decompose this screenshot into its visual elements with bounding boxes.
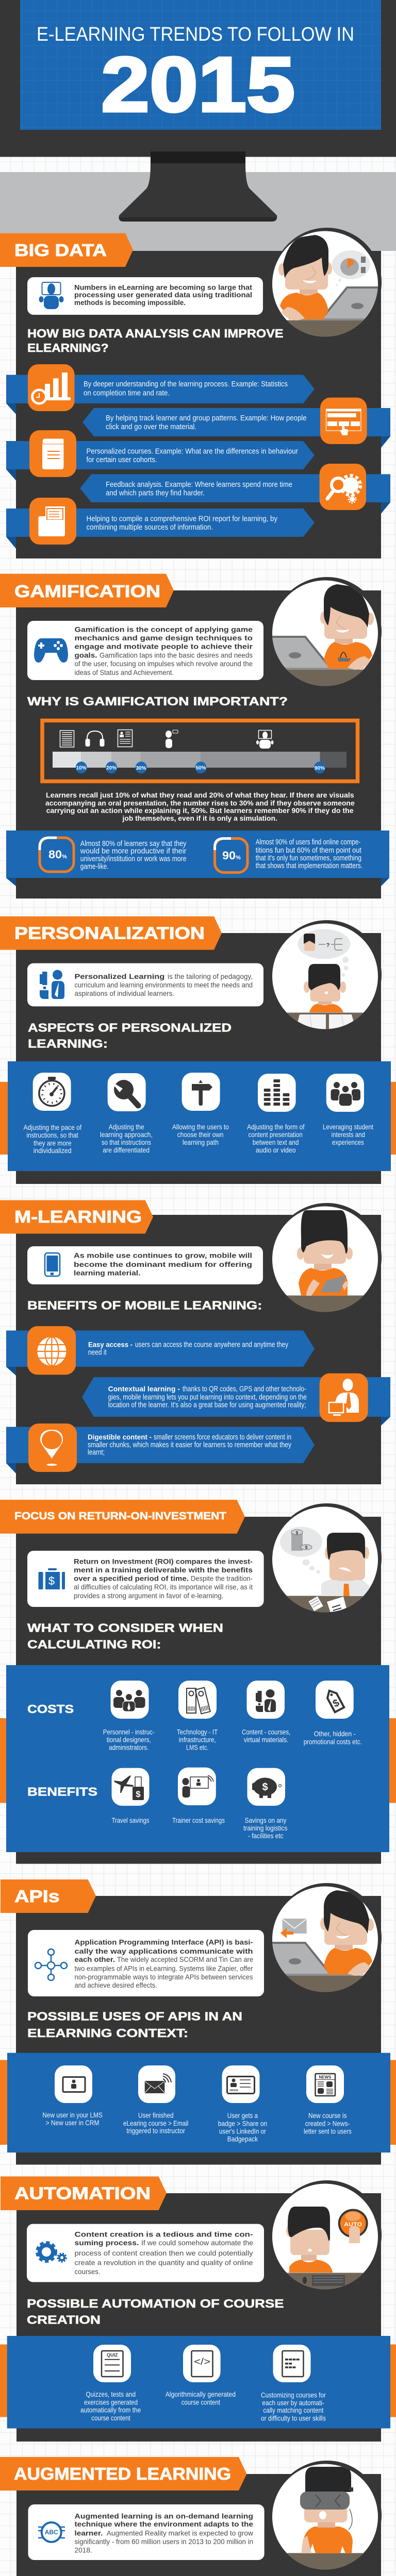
ribbon 5: [6, 498, 315, 549]
use: customizing courses: [261, 2345, 326, 2422]
icon: person and partial figure: [40, 970, 64, 999]
icon: user on screen: [63, 2077, 85, 2092]
icon: folder with document: [38, 506, 65, 536]
aspect 5: interests: Leveraging student: [323, 1123, 373, 1131]
intro card: and achieve desired effects.: [74, 1981, 157, 1989]
icon: quiz sheet: [102, 2351, 123, 2377]
icon: wrench: [110, 1080, 138, 1106]
thought bubble: coins: $: [296, 1531, 299, 1535]
ribbon: digestible content: smaller chunks, which makes it easier for learners to remember what they: [88, 1441, 292, 1449]
icon: stopwatch: [39, 1077, 64, 1106]
intro card: provides a strong argument in favor of e-learning.: [74, 1591, 224, 1600]
intro card: processing user generated data using traditional: [74, 291, 252, 299]
panel: m-learning: [0, 1200, 390, 1484]
aspect 2: approach: Adjusting the: [109, 1123, 144, 1131]
aspect 4: form: Adjusting the form of: [247, 1123, 305, 1131]
title: E-LEARNING TRENDS TO FOLLOW IN: [37, 24, 354, 45]
intro card: [28, 1930, 264, 1996]
subheading: [27, 2010, 242, 2040]
use: quizzes: exercises generated: [84, 2398, 138, 2406]
panel: personalization: [0, 917, 396, 1184]
icon: quiz sheet: QUIZ: [107, 2352, 118, 2358]
icon: block columns: [264, 1079, 289, 1106]
intro card: suming process.: [74, 2239, 139, 2247]
icon: ABC target: [38, 2522, 65, 2542]
illustration: learner with game controller: [270, 577, 384, 690]
icon: signpost: [192, 1080, 212, 1106]
icon: price tag: $: [331, 1697, 341, 1710]
cost: personnel: tional designers,: [107, 1736, 151, 1744]
stat: 80%: would be more productive if their: [80, 847, 187, 855]
illustration: learner with laptop and pie chart thought: [270, 228, 384, 341]
ribbon: easy access: users can access the course anywhere and anytime they: [135, 1341, 289, 1349]
aspect 1: pace: individualized: [34, 1146, 72, 1155]
intro card: Numbers in eLearning are becoming so large that: [74, 283, 252, 291]
icon: newsletter: NEWS: [319, 2075, 332, 2079]
intro card: mechanics and game design techniques to: [74, 634, 253, 642]
intro card: Personalized Learning: [74, 972, 164, 980]
ribbon: easy access: Easy access -: [88, 1341, 133, 1349]
ribbon: contextual learning: gies, mobile learning lets you put learning into context, depending on the: [108, 1393, 307, 1401]
icon: document: [60, 731, 74, 747]
intro card: technique where the environment adapts to the: [74, 2520, 253, 2528]
intro card: The widely accepted SCORM and Tin Can are: [117, 1955, 253, 1963]
heading flag: gamification: [0, 574, 174, 607]
ribbon 3: for certain user cohorts.: [87, 456, 157, 464]
ribbon: contextual learning: location of the learner. It's also a great base for using augmented reality;: [108, 1401, 306, 1409]
intro card: of the user, focusing on impulses which revolve around the: [74, 659, 253, 668]
use: new course: [304, 2065, 352, 2135]
aspect 3: path: [172, 1073, 229, 1146]
intro card: process of content creation then we could potentially: [74, 2249, 253, 2257]
intro card: goals.: [74, 651, 97, 659]
retention chart: [42, 720, 358, 781]
explanatory paragraph: Learners recall just 10% of what they read and 20% of what they hear. If there are visuals: [46, 791, 354, 799]
intro card: learner.: [74, 2529, 103, 2537]
icon: team: [113, 1690, 145, 1711]
ribbon: contextual learning: thanks to QR codes, GPS and other technolo-: [183, 1385, 306, 1394]
use: new user: > New user in CRM: [46, 2119, 99, 2127]
heading flag: APIs: APIs: [14, 1887, 60, 1906]
ribbon: contextual learning: Contextual learning -: [108, 1385, 180, 1393]
subheading: CREATION: [27, 2313, 101, 2327]
intro card: Augmented Reality market is expected to grow: [107, 2529, 254, 2537]
use: algorithmic content: [166, 2345, 236, 2406]
intro card: If we could somehow automate the: [141, 2239, 253, 2247]
cost: other: promotional costs etc.: [304, 1737, 362, 1745]
use: quizzes: [80, 2345, 141, 2422]
use: customizing courses: cally matching content: [263, 2406, 323, 2414]
use: new course: letter sent to users: [304, 2127, 352, 2135]
intro card: is the tailoring of pedagogy,: [168, 972, 253, 980]
intro card: ment in a training deliverable with the benefits: [74, 1566, 253, 1574]
use: badge: Badgepack: [227, 2134, 258, 2143]
aspect 3: path: choose their own: [177, 1130, 224, 1139]
panel: big data: [0, 228, 390, 558]
cost: technology: [177, 1681, 218, 1752]
heading flag: automation: AUTOMATION: [14, 2184, 151, 2203]
stat: 80%: Almost 80% of learners say that they: [80, 840, 187, 848]
subheading: LEARNING:: [28, 1037, 108, 1050]
intro card: Content creation is a tedious and time con-: [74, 2230, 253, 2239]
stat: 80%: game-like.: [80, 862, 109, 871]
ribbon 1: By deeper understanding of the learning process. Example: Statistics: [84, 380, 288, 388]
ribbon: easy access: need it: [88, 1348, 107, 1357]
intro card: over a specified period of time.: [74, 1574, 189, 1582]
intro card: two examples of APIs in eLearning. Systems like Zapier, offer: [74, 1964, 253, 1972]
percent markers: 30%: [136, 766, 146, 771]
icon: profile sheet: [118, 730, 132, 747]
intro card: Return on Investment (ROI) compares the invest-: [74, 1557, 253, 1565]
ribbon 4: [80, 464, 390, 514]
cost: technology: Technology - IT: [177, 1728, 218, 1736]
icon: globe: [37, 1336, 67, 1366]
intro card: aspirations of individual learners.: [74, 989, 174, 997]
icon: book: [42, 438, 63, 469]
use: new course: created > News-: [305, 2120, 350, 2128]
subheading: [28, 1021, 232, 1050]
icon: headphones: [86, 731, 104, 747]
icon: group of people: [331, 1082, 360, 1106]
intro card: al difficulties of calculating ROI, its importance will rise, as it: [74, 1583, 253, 1591]
intro card: Gamification taps into the basic desires and needs: [100, 651, 253, 659]
benefit: travel: Travel savings: [111, 1816, 150, 1824]
cost: personnel: administrators.: [109, 1743, 148, 1752]
label: benefits: BENEFITS: [27, 1785, 97, 1798]
use: customizing courses: or difficulty to user skills: [261, 2414, 326, 2422]
icon: browser with pointer hand: [326, 409, 361, 435]
intro card: each other.: [74, 1955, 115, 1963]
percent markers: 10%: [76, 766, 87, 771]
aspect 4: form: content presentation: [249, 1130, 303, 1139]
stat: 90%: that shows that implementation matters.: [256, 862, 362, 870]
icon: plane and suitcase: $: [136, 1789, 141, 1799]
heading flag: big data: [0, 233, 133, 267]
heading flag: m-learning: [0, 1200, 153, 1233]
panel: return on investment: [0, 1500, 396, 1864]
benefit: logistics: Savings on any: [245, 1816, 286, 1824]
button: auto: AUTO: [344, 2222, 362, 2228]
label: costs: COSTS: [27, 1702, 74, 1716]
intro card: [27, 277, 263, 315]
intro card: engage and motivate people to achieve their: [74, 642, 253, 651]
ribbon: digestible content: [6, 1423, 315, 1473]
use: customizing courses: each user by automati-: [262, 2399, 324, 2407]
heading flag: personalization: PERSONALIZATION: [14, 924, 205, 943]
subheading: POSSIBLE USES OF APIS IN AN: [27, 2010, 242, 2023]
icon: piggy bank: $: [262, 1782, 268, 1793]
stat: 80%: %: [62, 854, 67, 860]
icon: person with computer: [329, 1379, 359, 1416]
use: customizing courses: Customizing courses for: [261, 2391, 326, 2399]
stat: 90%: titions fun but 60% of them point out: [256, 846, 361, 855]
subheading: [27, 1621, 223, 1651]
ribbon 1: on completion time and rate.: [84, 389, 170, 398]
subheading: ELEARNING?: [27, 341, 109, 354]
aspect 2: approach: are differentiated: [103, 1146, 150, 1154]
use: badge: [218, 2065, 267, 2143]
illustration: learner with VR headset: [270, 2461, 384, 2574]
stat: 80%: university/institution or work was more: [80, 855, 187, 863]
intro card: 2018.: [74, 2546, 92, 2554]
ribbon 2: click and go over the material.: [106, 423, 196, 431]
ribbon: digestible content: smaller screens force educators to deliver content in: [154, 1433, 291, 1442]
use: algorithmic content: course content: [182, 2398, 220, 2406]
aspect 1: pace: Adjusting the pace of: [24, 1123, 81, 1131]
header: monitor with title: [0, 0, 396, 251]
stat: 80%: [40, 838, 187, 872]
icon: block sheet: [283, 2351, 303, 2377]
use: course finished: eLearing course > Email: [123, 2119, 188, 2127]
heading flag: augmented learning: [0, 2457, 246, 2490]
cost: personnel: Personnel - instruc-: [103, 1728, 155, 1736]
intro card: [27, 1551, 264, 1607]
cost: other: [304, 1681, 362, 1745]
monitor stand: [119, 151, 277, 222]
percent markers: [76, 761, 325, 773]
ribbon 5: Helping to compile a comprehensive ROI report for learning, by: [87, 515, 278, 523]
aspect 3: path: Allowing the users to: [172, 1123, 229, 1131]
use: algorithmic content: Algorithmically generated: [166, 2390, 236, 2398]
icon: network nodes: [35, 1949, 67, 1980]
icon: bar chart and clock: [31, 372, 71, 405]
intro card: [27, 2224, 264, 2282]
use: course finished: User finished: [138, 2111, 173, 2120]
icon: money case: [38, 1568, 65, 1589]
benefit: trainer: Trainer cost savings: [172, 1816, 225, 1824]
explanatory paragraph: [45, 791, 355, 822]
panel: augmented learning: [0, 2457, 396, 2576]
ribbon: easy access: [6, 1326, 315, 1376]
year: 2015: [101, 41, 295, 128]
aspect 1: pace: they are more: [34, 1139, 72, 1147]
icon: ID card: [227, 2076, 255, 2094]
use: badge: badge > Share on: [218, 2120, 267, 2128]
subheading: POSSIBLE AUTOMATION OF COURSE: [27, 2297, 284, 2310]
cost: content: [242, 1681, 290, 1744]
button: auto: [338, 2209, 368, 2243]
subheading: ELEARNING CONTEXT:: [27, 2026, 188, 2040]
aspect 4: form: between text and: [253, 1138, 299, 1146]
blue band: API uses: [7, 2053, 390, 2153]
ribbon 4: Feedback analysis. Example: Where learners spend more time: [106, 481, 292, 489]
use: quizzes: automatically from the: [80, 2406, 141, 2414]
use: badge: user's LinkedIn or: [219, 2127, 266, 2135]
percent markers: 90%: [315, 766, 325, 771]
ribbon 2: [82, 398, 390, 448]
aspect 2: approach: learning approach,: [100, 1130, 153, 1139]
statistics band: [6, 831, 389, 886]
cost: technology: infrastructure,: [179, 1736, 216, 1744]
stat: 80%: 80: [48, 848, 62, 861]
illustration: learner reading: [270, 920, 384, 1033]
icon: ID card: 240334: [229, 2089, 238, 2092]
illustration: learner with tablet: [270, 1203, 384, 1316]
icon: game controller: [34, 638, 68, 663]
cost: personnel: [103, 1681, 155, 1752]
intro card: curriculum and learning environments to meet the needs and: [74, 981, 253, 989]
ribbon 4: and which parts they find harder.: [106, 489, 205, 497]
explanatory paragraph: job themselves, even if it is only a simulation.: [122, 814, 277, 822]
intro card: Application Programming Interface (API) is basi-: [74, 1938, 253, 1946]
ribbon: digestible content: learnt;: [88, 1449, 105, 1457]
intro card: significantly - from 60 million users in 2013 to 200 million in: [74, 2537, 253, 2546]
subheading: CALCULATING ROI:: [27, 1637, 161, 1651]
cost: content: Content - courses,: [242, 1728, 290, 1736]
use: new user: New user in your LMS: [42, 2111, 103, 2119]
thought bubble: coins: $: [305, 1545, 308, 1550]
intro card: ideas of Status and Achievement.: [74, 668, 174, 676]
percent markers: 20%: [106, 766, 117, 771]
cost: technology: LMS etc.: [186, 1743, 209, 1752]
heading flag: gamification: GAMIFICATION: [14, 582, 160, 601]
heading flag: ROI: FOCUS ON RETURN-ON-INVESTMENT: [14, 1511, 226, 1522]
benefit: logistics: training logistics: [243, 1824, 287, 1832]
stat: 90%: that it's only fun sometimes, something: [256, 854, 361, 862]
intro card: create a revolution in the quantity and quality of online: [74, 2259, 253, 2267]
panel: gamification: [0, 574, 389, 899]
benefit: travel: [111, 1768, 150, 1824]
icon: binders: [187, 1688, 210, 1714]
illustration: user with mail arrow: [270, 1883, 384, 1996]
aspect 5: interests: [323, 1074, 373, 1146]
heading flag: m-learning: M-LEARNING: [14, 1207, 142, 1226]
intro card: [27, 1246, 263, 1284]
subheading: [27, 327, 284, 354]
icon: trainer and screen: [183, 1775, 213, 1798]
heading flag: big data: BIG DATA: [14, 241, 107, 260]
heading flag: automation: [1, 2176, 167, 2210]
intro card: As mobile use continues to grow, mobile will: [74, 1251, 252, 1260]
thought bubble: choice: [298, 929, 350, 977]
ribbon 3: Personalized courses. Example: What are the differences in behaviour: [87, 447, 298, 455]
intro card: non-programmable ways to integrate APIs between services: [74, 1973, 253, 1981]
icon: phone: [45, 1253, 60, 1276]
intro card: [28, 2504, 265, 2560]
ribbon 1: [6, 364, 315, 414]
heading flag: ROI: [0, 1500, 245, 1534]
icon: ABC target: ABC: [45, 2529, 58, 2536]
illustration: user pressing auto button: [270, 2180, 384, 2294]
icon: code sheet: </>: [194, 2357, 210, 2367]
subheading: ASPECTS OF PERSONALIZED: [28, 1021, 232, 1034]
use: new user: [42, 2065, 103, 2127]
intro card: [27, 621, 263, 680]
benefit: logistics: - facilities etc: [248, 1832, 284, 1840]
aspect 4: form: audio or video: [256, 1146, 296, 1154]
use: quizzes: course content: [91, 2414, 130, 2422]
icon: money case: $: [48, 1574, 55, 1587]
icon: email with signal: [145, 2074, 171, 2093]
panel: automation: [0, 2176, 396, 2442]
intro card: courses.: [74, 2267, 100, 2276]
stat: 90%: %: [236, 855, 241, 861]
icon: person and partial figure: [256, 1689, 276, 1712]
subheading: HOW BIG DATA ANALYSIS CAN IMPROVE: [27, 327, 284, 340]
subheading: BENEFITS OF MOBILE LEARNING:: [27, 1298, 262, 1312]
icon: magnifier and gears: [327, 476, 360, 503]
use: badge: User gets a: [227, 2111, 258, 2120]
aspect 5: interests: interests and: [332, 1130, 365, 1139]
thought bubble: choice: ?: [326, 942, 330, 948]
icon: gears: [37, 2243, 66, 2262]
benefit: trainer: [172, 1768, 225, 1824]
blue band: costs and benefits: [6, 1665, 389, 1852]
subheading: [27, 2297, 284, 2327]
scale bar: [53, 752, 346, 768]
illustration: businessman thinking of coins: [270, 1503, 384, 1617]
explanatory paragraph: carrying out an action while explaining it, 50%. But learners remember 90% if they do the: [46, 806, 354, 815]
intro card: Augmented learning is an on-demand learning: [74, 2512, 253, 2520]
use: quizzes: Quizzes, tests and: [86, 2390, 136, 2398]
aspect 5: interests: experiences: [332, 1138, 364, 1146]
benefit: logistics: [243, 1768, 287, 1840]
percent markers: 50%: [196, 766, 206, 771]
heading flag: APIs: [1, 1879, 96, 1913]
ribbon 5: combining multiple sources of information.: [87, 523, 213, 532]
ribbon: digestible content: Digestible content -: [88, 1433, 152, 1441]
subheading: WHY IS GAMIFICATION IMPORTANT?: [27, 694, 288, 708]
intro card: Gamification is the concept of applying game: [74, 625, 253, 634]
stat: 90%: [214, 838, 362, 873]
ribbon: contextual learning: [82, 1374, 390, 1426]
cost: other: Other, hidden -: [314, 1730, 356, 1738]
aspect 4: form: [247, 1074, 305, 1154]
ribbon 2: By helping track learner and group patterns. Example: How people: [106, 414, 307, 422]
intro card: [27, 963, 263, 1006]
ribbon 3: [6, 430, 315, 481]
subheading: WHAT TO CONSIDER WHEN: [27, 1621, 223, 1634]
aspect 1: pace: [24, 1073, 81, 1155]
stat: 90%: Almost 90% of users find online compe-: [256, 838, 360, 846]
aspect 2: approach: [100, 1073, 153, 1154]
intro card: Despite the tradition-: [191, 1574, 253, 1582]
icon: person at screen: [39, 282, 64, 309]
aspect 3: path: learning path: [183, 1138, 219, 1146]
explanatory paragraph: accompanying an oral presentation, the number rises to 30% and if they observe someone: [45, 799, 355, 807]
intro card: cally the way applications communicate with: [74, 1947, 253, 1955]
icon: speaker: [166, 730, 178, 748]
heading flag: personalization: [0, 917, 222, 950]
use: new course: New course is: [308, 2111, 346, 2120]
intro card: become the dominant medium for offering: [74, 1260, 252, 1268]
heading flag: augmented learning: AUGMENTED LEARNING: [14, 2464, 231, 2483]
aspect 2: approach: so that instructions: [102, 1138, 151, 1146]
thought bubble: coins: [280, 1527, 322, 1573]
cost: content: virtual materials.: [244, 1736, 288, 1744]
use: course finished: [123, 2065, 188, 2135]
icon: map pin: [40, 1430, 63, 1466]
icon: person at screen: [256, 731, 273, 749]
blue band: automation uses: [7, 2336, 390, 2429]
aspect 1: pace: instructions, so that: [26, 1131, 78, 1139]
panel: APIs: [0, 1879, 396, 2165]
use: course finished: triggered to instructor: [126, 2127, 185, 2135]
intro card: methods is becoming impossible.: [74, 298, 186, 307]
blue band: aspects: [8, 1061, 391, 1171]
intro card: learning material.: [74, 1268, 140, 1277]
stat: 90%: 90: [222, 849, 236, 862]
